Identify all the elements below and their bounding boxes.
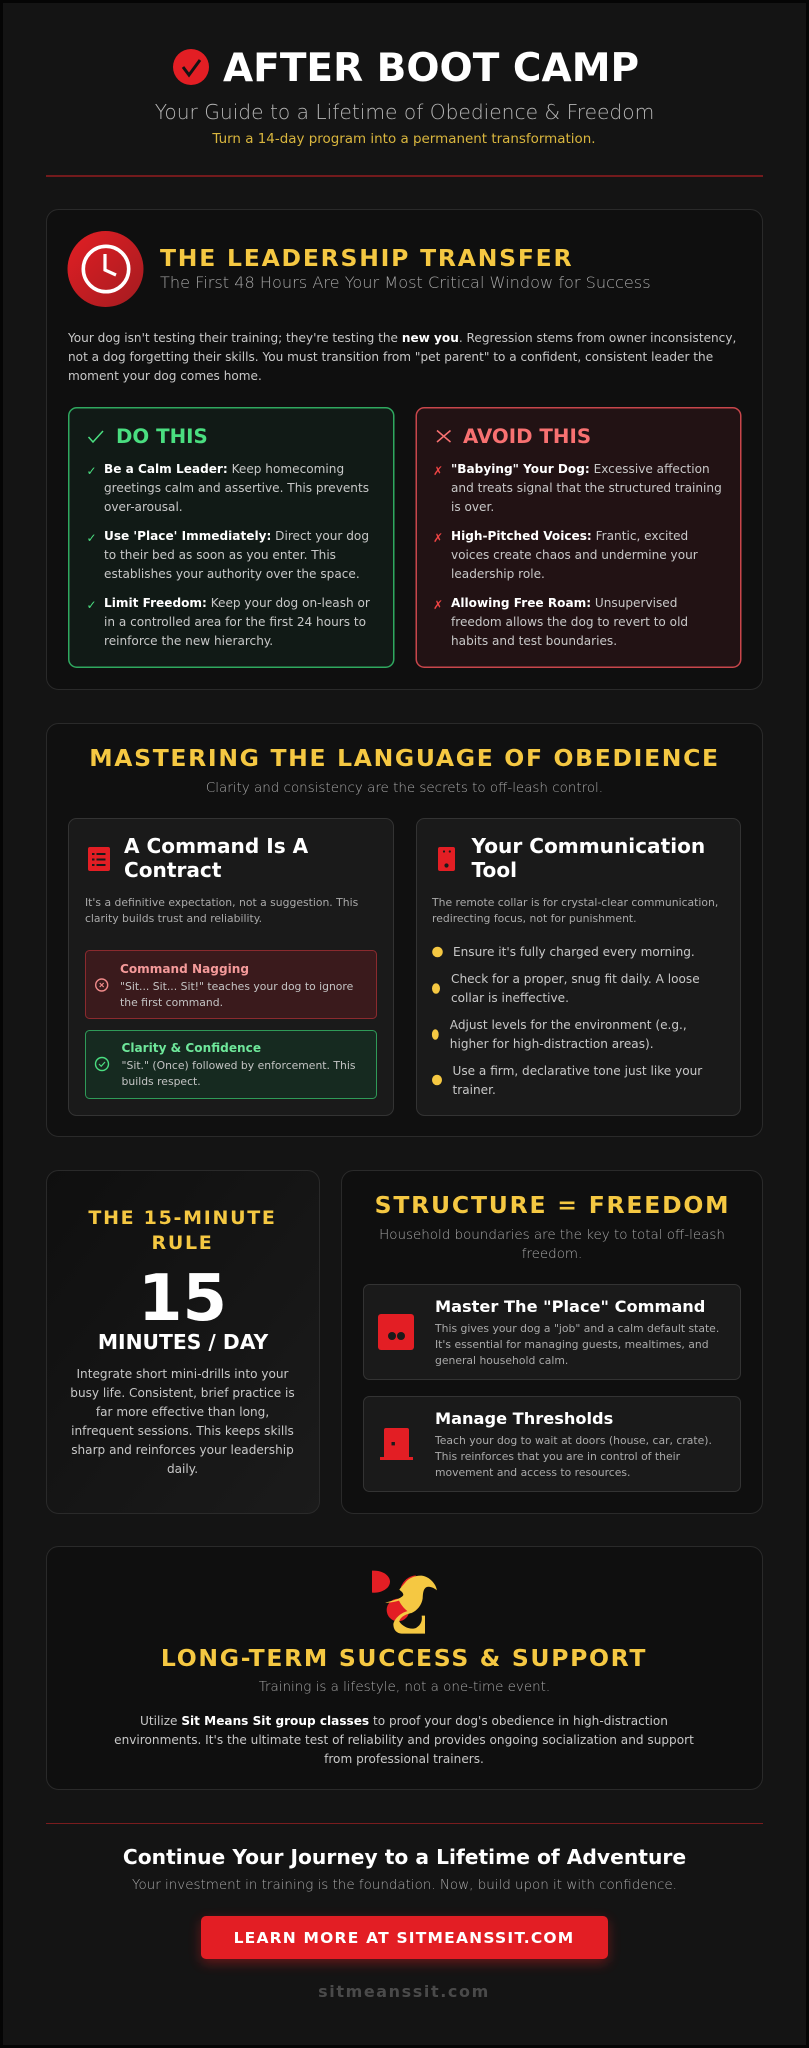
bullet: Adjust levels for the environment (e.g., bbox=[450, 1018, 687, 1032]
heading: STRUCTURE = FREEDOM bbox=[375, 1191, 730, 1219]
tagline: Turn a 14-day program into a permanent transformation. bbox=[211, 132, 596, 147]
list item: Be a Calm Leader: Keep homecoming bbox=[104, 462, 344, 476]
list item bbox=[433, 596, 688, 648]
card title: Your Communication bbox=[470, 834, 705, 858]
card: place command: general household calm. bbox=[435, 1354, 568, 1367]
list item: ✓ bbox=[86, 464, 97, 478]
callout: clarity: "Sit." (Once) followed by enforcement. This bbox=[122, 1059, 356, 1072]
list item: leadership role. bbox=[451, 567, 545, 581]
description bbox=[114, 1714, 694, 1766]
title: AFTER BOOT CAMP bbox=[223, 46, 639, 91]
icon: remote bbox=[438, 847, 455, 871]
list item bbox=[86, 596, 370, 648]
card: thresholds bbox=[364, 1396, 740, 1492]
card description bbox=[431, 896, 718, 925]
header bbox=[155, 46, 654, 147]
description: Integrate short mini-drills into your bbox=[76, 1367, 289, 1381]
list item bbox=[433, 462, 722, 514]
panel: language of obedience bbox=[46, 724, 762, 1136]
list item bbox=[86, 529, 369, 581]
list item: "Babying" Your Dog: Excessive affection bbox=[451, 462, 710, 476]
subheading bbox=[379, 1228, 725, 1262]
card title bbox=[124, 834, 309, 882]
description: daily. bbox=[167, 1462, 198, 1476]
list item: habits and test boundaries. bbox=[451, 634, 617, 648]
icon: cross bbox=[437, 430, 450, 442]
icon: red check badge bbox=[173, 49, 209, 85]
heading: DO THIS bbox=[116, 425, 208, 448]
bullet: Check for a proper, snug fit daily. A loose bbox=[451, 972, 700, 986]
card: command contract bbox=[68, 818, 394, 1116]
heading: THE LEADERSHIP TRANSFER bbox=[160, 244, 573, 272]
intro text: Your dog isn't testing their training; they're testing the new you. Regression stems from owner inconsistency, bbox=[67, 331, 736, 345]
list item: voices create chaos and undermine your bbox=[451, 548, 698, 562]
panel: long-term success bbox=[46, 1546, 762, 1790]
callout: nagging: Command Nagging bbox=[120, 962, 249, 976]
description: sharp and reinforces your leadership bbox=[71, 1443, 294, 1457]
card: place command: This gives your dog a "job" and a calm default state. bbox=[434, 1322, 719, 1335]
card: thresholds: movement and access to resources. bbox=[435, 1466, 630, 1479]
list item: greetings calm and assertive. This prevents bbox=[104, 481, 369, 495]
card title: Tool bbox=[472, 858, 517, 882]
callout: clarity: Clarity & Confidence bbox=[122, 1041, 261, 1055]
panel: 15-minute rule bbox=[46, 1170, 320, 1514]
bullet: trainer. bbox=[452, 1083, 496, 1097]
list item: to their bed as soon as you enter. This bbox=[104, 548, 336, 562]
list item: reinforce the new hierarchy. bbox=[104, 634, 273, 648]
callout: nagging: "Sit... Sit... Sit!" teaches your dog to ignore bbox=[120, 980, 354, 993]
icon: dog logo bbox=[372, 1570, 437, 1634]
description: far more effective than long, bbox=[96, 1405, 269, 1419]
description: environments. It's the ultimate test of reliability and provides ongoing socialization and support bbox=[114, 1733, 694, 1747]
button: LEARN MORE AT SITMEANSSIT.COM bbox=[234, 1929, 574, 1947]
description: from professional trainers. bbox=[324, 1752, 484, 1766]
card: thresholds: Teach your dog to wait at doors (house, car, crate). bbox=[434, 1434, 712, 1447]
heading bbox=[88, 1207, 277, 1254]
list item: ✗ bbox=[433, 598, 443, 612]
description: infrequent sessions. This keeps skills bbox=[71, 1424, 294, 1438]
icon: place bed bbox=[378, 1314, 414, 1350]
callout: nagging bbox=[86, 950, 376, 1018]
heading: AVOID THIS bbox=[463, 425, 591, 448]
list item: ✗ bbox=[433, 531, 443, 545]
callout: clarity bbox=[86, 1030, 376, 1098]
bullet: Use a firm, declarative tone just like your bbox=[452, 1064, 702, 1078]
list item: Limit Freedom: Keep your dog on-leash or bbox=[104, 596, 370, 610]
button bbox=[201, 1916, 608, 1963]
bullet: Ensure it's fully charged every morning. bbox=[453, 945, 695, 959]
description: busy life. Consistent, brief practice is bbox=[70, 1386, 295, 1400]
card description: clarity builds trust and reliability. bbox=[85, 912, 262, 925]
icon: check bbox=[88, 431, 103, 442]
footer bbox=[123, 1845, 686, 2001]
intro text: moment your dog comes home. bbox=[68, 369, 262, 383]
list item: Use 'Place' Immediately: Direct your dog bbox=[104, 529, 369, 543]
footer heading: Continue Your Journey to a Lifetime of Adventure bbox=[123, 1845, 686, 1869]
card: thresholds: This reinforces that you are in control of their bbox=[434, 1450, 681, 1463]
card: thresholds: Manage Thresholds bbox=[435, 1409, 613, 1428]
subheading: Training is a lifestyle, not a one-time event. bbox=[259, 1680, 550, 1695]
footer subheading: Your investment in training is the foundation. Now, build upon it with confidence. bbox=[132, 1878, 677, 1893]
card: place command: It's essential for managing guests, mealtimes, and bbox=[435, 1338, 709, 1351]
card title bbox=[470, 834, 705, 882]
list item: High-Pitched Voices: Frantic, excited bbox=[451, 529, 688, 543]
heading: RULE bbox=[152, 1232, 213, 1254]
bullet bbox=[432, 972, 700, 1005]
list item bbox=[86, 462, 369, 514]
card: place command: Master The "Place" Command bbox=[435, 1297, 705, 1316]
subtitle: Your Guide to a Lifetime of Obedience & Freedom bbox=[155, 100, 654, 124]
icon: door bbox=[380, 1428, 413, 1460]
panel: avoid this bbox=[416, 408, 741, 667]
icon: list bbox=[88, 847, 110, 871]
card description: It's a definitive expectation, not a suggestion. This bbox=[85, 896, 359, 909]
card title: Contract bbox=[124, 858, 222, 882]
subheading: The First 48 Hours Are Your Most Critical Window for Success bbox=[160, 273, 651, 292]
panel: leadership transfer bbox=[46, 210, 762, 690]
subheading: Clarity and consistency are the secrets to off-leash control. bbox=[206, 781, 603, 796]
list item: freedom allows the dog to revert to old bbox=[451, 615, 688, 629]
description bbox=[70, 1367, 295, 1476]
heading: LONG-TERM SUCCESS & SUPPORT bbox=[161, 1644, 647, 1672]
card description: The remote collar is for crystal-clear communication, bbox=[431, 896, 718, 909]
list item: over-arousal. bbox=[104, 500, 183, 514]
card: communication tool bbox=[416, 818, 740, 1116]
website: sitmeanssit.com bbox=[318, 1982, 490, 2001]
list item: ✗ bbox=[433, 464, 443, 478]
list item: ✓ bbox=[86, 598, 97, 612]
callout: nagging: the first command. bbox=[120, 996, 223, 1009]
heading: MASTERING THE LANGUAGE OF OBEDIENCE bbox=[89, 744, 720, 772]
panel: do this bbox=[69, 408, 394, 667]
bullet bbox=[432, 1018, 687, 1051]
list item: ✓ bbox=[86, 531, 97, 545]
list item: establishes your authority over the space. bbox=[104, 567, 360, 581]
list item bbox=[433, 529, 698, 581]
list item: in a controlled area for the first 24 hours to bbox=[104, 615, 366, 629]
list item: is over. bbox=[451, 500, 494, 514]
icon: clock bbox=[68, 231, 144, 307]
panel: structure equals freedom bbox=[342, 1170, 762, 1514]
subheading: Household boundaries are the key to total off-leash bbox=[379, 1228, 725, 1243]
card title: A Command Is A bbox=[124, 834, 309, 858]
card description bbox=[85, 896, 359, 925]
bullet bbox=[432, 1064, 702, 1097]
intro text bbox=[67, 331, 736, 383]
callout: clarity: builds respect. bbox=[122, 1075, 201, 1088]
bullet: collar is ineffective. bbox=[451, 991, 569, 1005]
intro text: not a dog forgetting their skills. You must transition from "pet parent" to a confident, consistent leader the bbox=[68, 350, 713, 364]
bullet: higher for high-distraction areas). bbox=[450, 1037, 654, 1051]
icon: check circle bbox=[96, 1058, 108, 1070]
icon: x circle bbox=[96, 979, 108, 991]
card: place command bbox=[364, 1284, 740, 1380]
heading: THE 15-MINUTE bbox=[88, 1207, 277, 1229]
unit: MINUTES / DAY bbox=[98, 1330, 268, 1354]
subheading: freedom. bbox=[522, 1247, 582, 1262]
list item: Allowing Free Roam: Unsupervised bbox=[451, 596, 677, 610]
card description: redirecting focus, not for punishment. bbox=[432, 912, 637, 925]
description: Utilize Sit Means Sit group classes to proof your dog's obedience in high-distraction bbox=[140, 1714, 668, 1728]
list item: and treats signal that the structured training bbox=[451, 481, 722, 495]
big number: 15 bbox=[138, 1262, 227, 1336]
